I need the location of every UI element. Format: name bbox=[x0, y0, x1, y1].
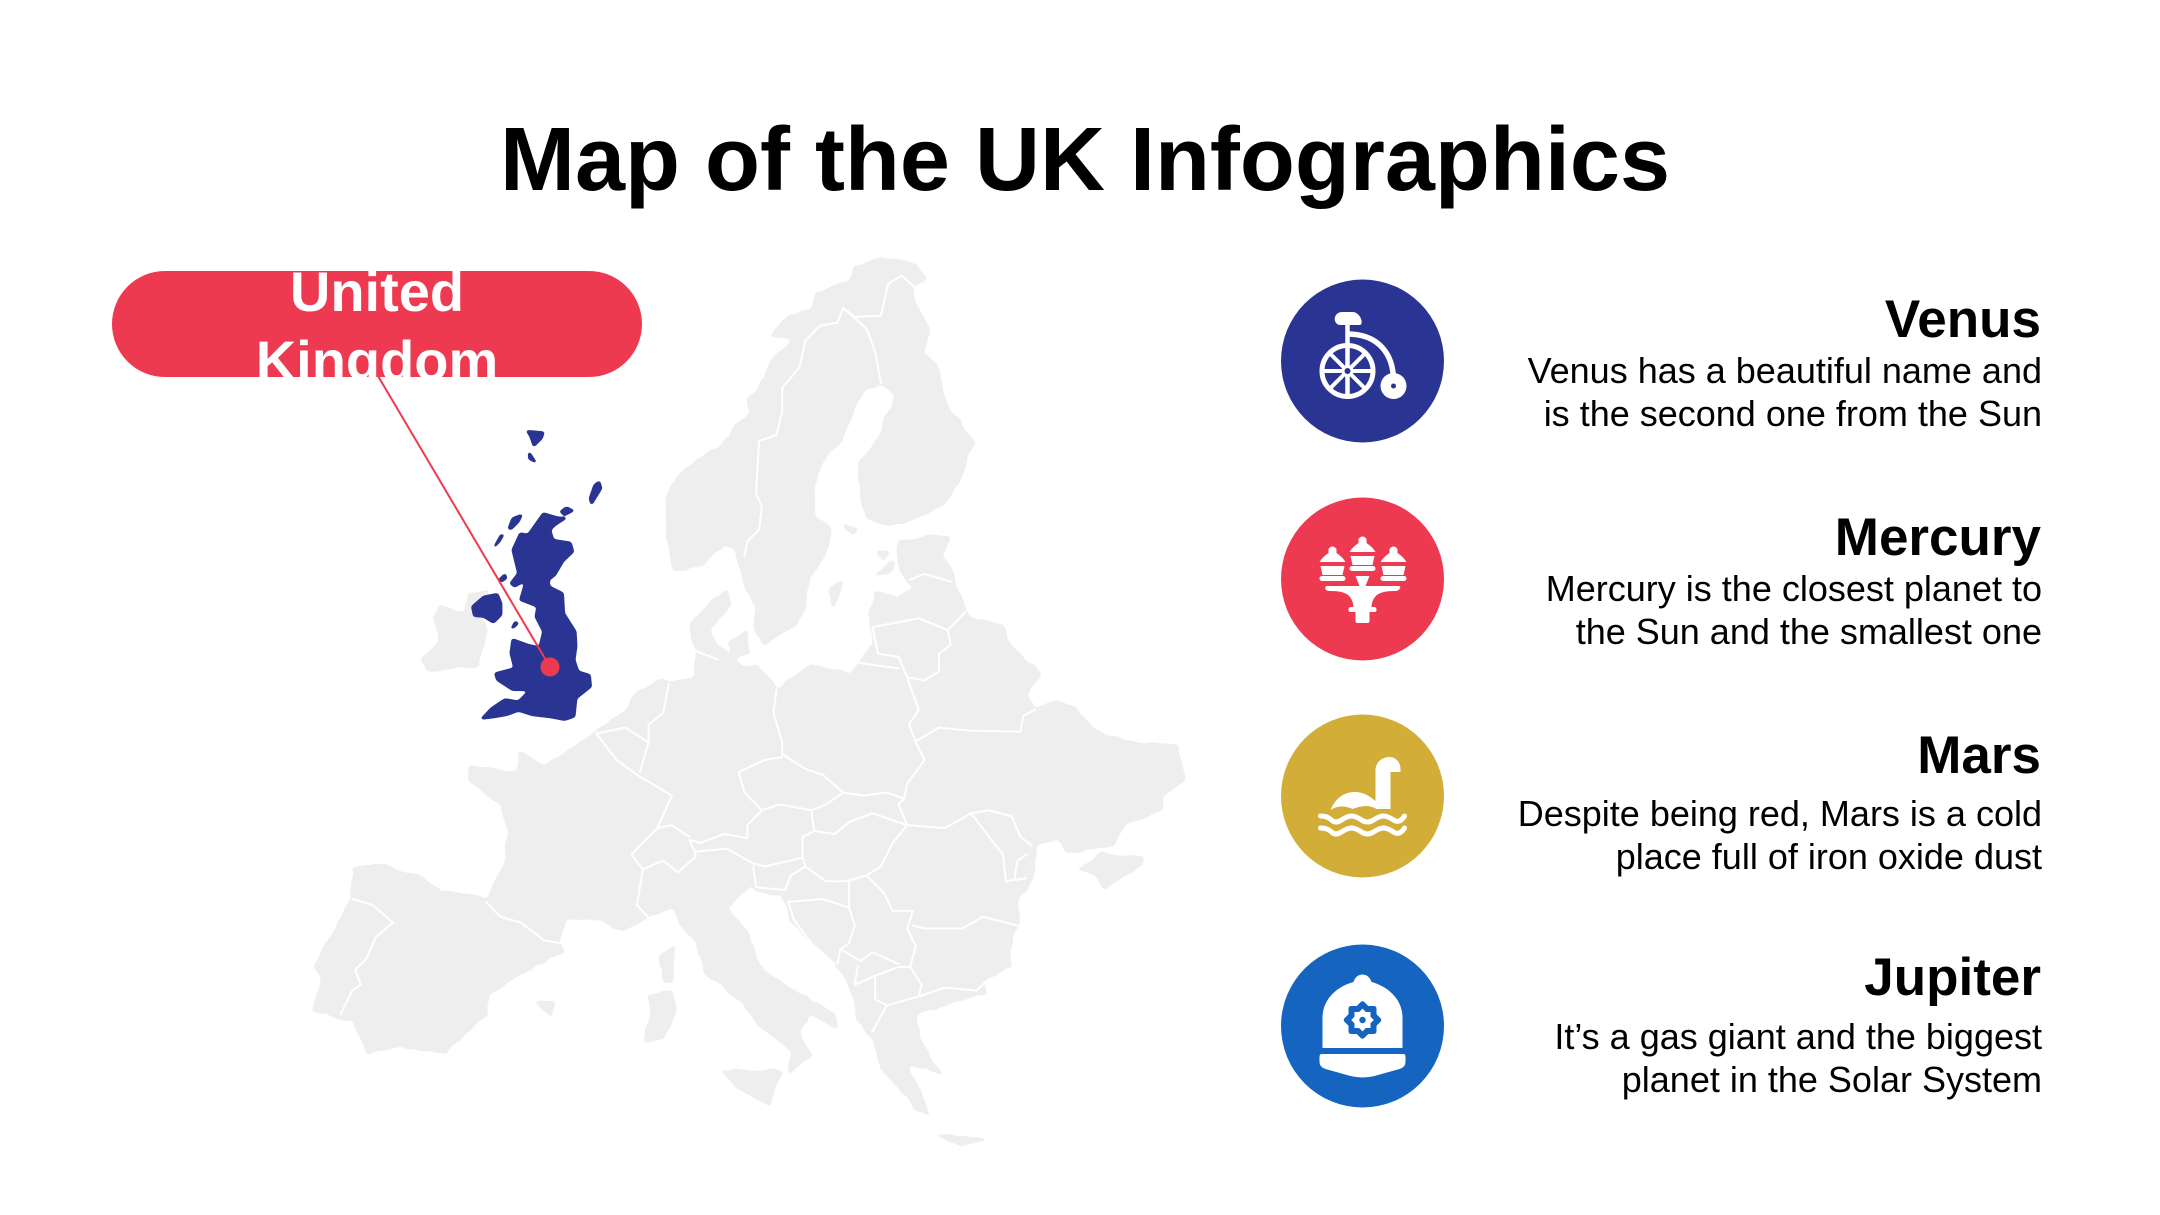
text block: Jupiter: It’s a gas giant and the biggest bbox=[1554, 1016, 2042, 1057]
text block: Mars bbox=[1518, 726, 2042, 877]
text block: Venus bbox=[1528, 290, 2042, 434]
text block: Jupiter: Jupiter bbox=[1864, 948, 2041, 1007]
text block: Venus: is the second one from the Sun bbox=[1544, 393, 2042, 434]
text block: Jupiter: planet in the Solar System bbox=[1622, 1059, 2042, 1100]
icon: street lamp bbox=[1281, 498, 1444, 660]
text block: Venus: Venus bbox=[1885, 290, 2041, 349]
text block: Jupiter bbox=[1554, 948, 2042, 1100]
text block: Mercury: the Sun and the smallest one bbox=[1576, 611, 2042, 652]
icon: police helmet bbox=[1281, 944, 1444, 1108]
leader line to marker bbox=[378, 376, 550, 667]
icon: penny-farthing bbox=[1281, 280, 1444, 442]
callout pill: United Kingdom: Kingdom bbox=[256, 329, 498, 392]
text block: Mercury: Mercury bbox=[1835, 508, 2042, 567]
text block: Mars: Mars bbox=[1917, 726, 2041, 785]
text block: Mercury bbox=[1546, 508, 2042, 652]
map marker bbox=[540, 658, 560, 676]
callout pill: United Kingdom bbox=[112, 260, 642, 392]
text block: Venus: Venus has a beautiful name and bbox=[1528, 350, 2042, 391]
title: Map of the UK Infographics bbox=[500, 110, 1670, 210]
text block: Mercury: Mercury is the closest planet to bbox=[1546, 568, 2042, 609]
map of Europe bbox=[312, 258, 1184, 1147]
callout pill: United Kingdom: United bbox=[290, 260, 464, 323]
text block: Mars: Despite being red, Mars is a cold bbox=[1518, 793, 2042, 834]
icon: loch ness monster bbox=[1281, 714, 1444, 878]
text block: Mars: place full of iron oxide dust bbox=[1616, 836, 2042, 877]
highlighted United Kingdom bbox=[472, 431, 601, 720]
